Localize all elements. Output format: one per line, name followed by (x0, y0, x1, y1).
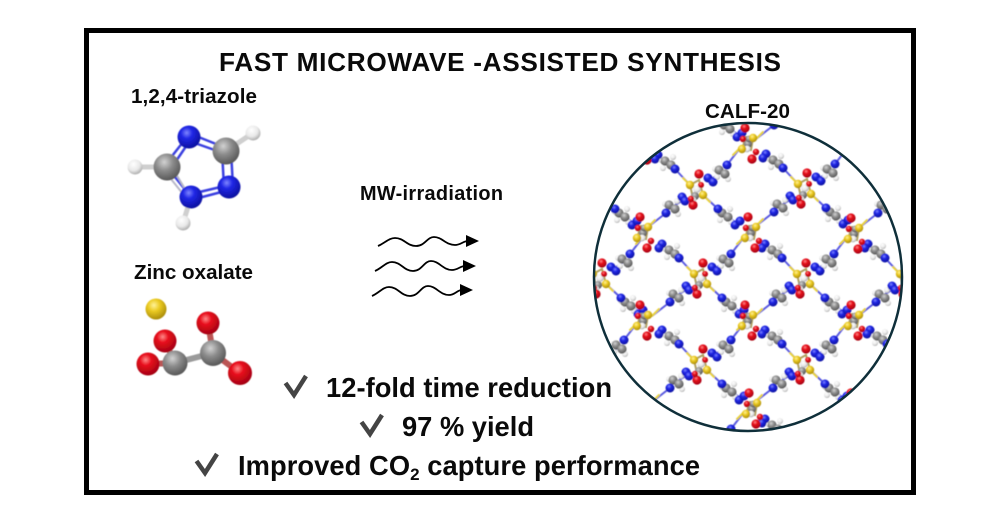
benefit: 12-fold time reduction: 12-fold time reduction (326, 372, 612, 403)
benefit: 97 % yield: 97 % yield (402, 411, 534, 442)
panel: CALF-20 crystal lattice (592, 122, 904, 432)
arrow: wave 2 (375, 260, 476, 272)
benefit: improved CO2 capture performance: Improved CO (238, 450, 410, 481)
icon: check mark (196, 454, 217, 473)
arrow: wave 3 (372, 284, 473, 296)
label: CALF-20: CALF-20 (705, 100, 790, 123)
benefit: improved CO2 capture performance: 2 (410, 465, 420, 484)
icon: check mark (286, 376, 306, 395)
icon: zinc oxalate molecule (136, 298, 252, 385)
outer frame (86, 30, 914, 492)
arrows: microwave irradiation waves (372, 235, 479, 296)
icon: 1,2,4-triazole molecule (128, 126, 260, 230)
label: MW-irradiation: MW-irradiation (360, 183, 503, 205)
heading: 1,2,4-triazole: 1,2,4-triazole (131, 85, 257, 108)
arrow: wave 1 (378, 235, 479, 247)
title: FAST MICROWAVE -ASSISTED SYNTHESIS (219, 47, 781, 77)
icon: check mark (362, 415, 382, 434)
heading: zinc oxalate: Zinc oxalate (134, 261, 253, 284)
benefit: improved CO2 capture performance (196, 450, 700, 484)
benefit: improved CO2 capture performance: capture performance (420, 450, 700, 481)
